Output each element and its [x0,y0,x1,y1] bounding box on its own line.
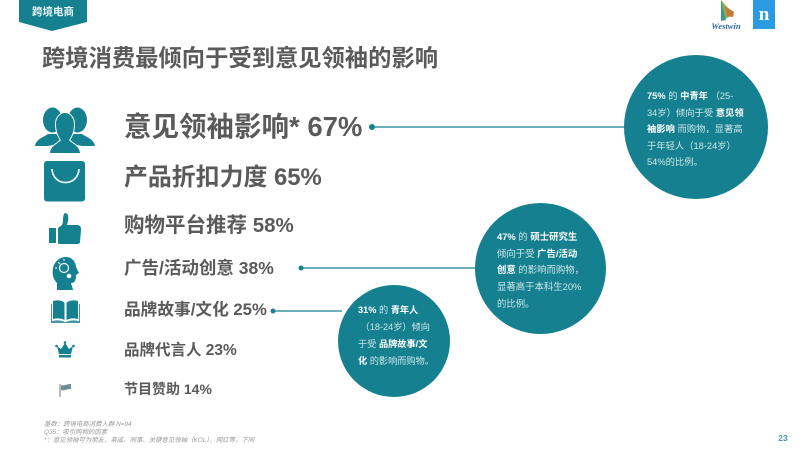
callout: youth 18-24: 化 的影响而购物。 [358,356,434,366]
icon: head with light bulb [52,257,79,290]
tag: section label [19,0,87,31]
callout: youth 18-24: 于受 品牌故事/文 [358,338,427,348]
logo: Nielsen [753,0,775,29]
callout: young adults 25-34: 于年轻人（18-24岁） [647,140,736,150]
icon: open book [51,300,80,323]
icon: crown [55,341,75,358]
icon: thumbs up [49,213,81,244]
callout: young adults 25-34: 袖影响 而购物，显著高 [647,124,743,134]
item: advertising creativity: 广告/活动创意 38% [124,258,274,278]
logo: Nielsen: n [759,4,769,25]
item: discounts: 产品折扣力度 65% [124,164,322,191]
footnote: Q35：吸引购物的因素 [44,429,107,436]
callout: postgraduates: 的比例。 [497,298,535,309]
item: programme sponsorship: 节目赞助 14% [124,381,212,397]
callout: youth 18-24: 31% 的 青年人 [358,304,418,314]
callout: young adults 25-34 [624,55,768,199]
tag: section label: 跨境电商 [32,6,74,18]
callout: young adults 25-34: 34岁）倾向于受 意见领 [647,108,744,118]
item: platform recommendation: 购物平台推荐 58% [124,214,294,237]
logo: Westwin: Westwin [711,21,741,31]
callout: young adults 25-34: 54%的比例。 [647,157,703,167]
icon: checkered flag [60,384,71,397]
callout: young adults 25-34: 75% 的 中青年 （25- [647,91,733,101]
callout: postgraduates: 倾向于受 广告/活动 [497,248,577,259]
item: brand ambassador: 品牌代言人 23% [124,342,237,359]
item: opinion leaders: 意见领袖影响* 67% [124,111,362,142]
item: brand story: 品牌故事/文化 25% [124,300,267,319]
callout: youth 18-24 [338,285,450,397]
footnote [44,420,255,444]
callout: youth 18-24: （18-24岁）倾向 [361,322,430,332]
page number: 23 [778,433,788,443]
callout: postgraduates: 创意 的影响而购物， [497,264,584,275]
callout: postgraduates [475,203,606,334]
callout: postgraduates: 显著高于本科生20% [497,281,581,292]
callout: postgraduates: 47% 的 硕士研究生 [497,231,577,242]
title: 跨境消费最倾向于受到意见领袖的影响 [42,45,438,71]
footnote: 基数：跨境电商消费人群 N=94 [44,421,132,428]
icon: people [35,108,95,153]
icon: shopping bag [44,161,85,202]
logo: Westwin [711,0,741,31]
footnote: *：意见领袖可为朋友、亲戚、同事、关键意见领袖（KOL）、网红等。下同 [44,437,254,444]
